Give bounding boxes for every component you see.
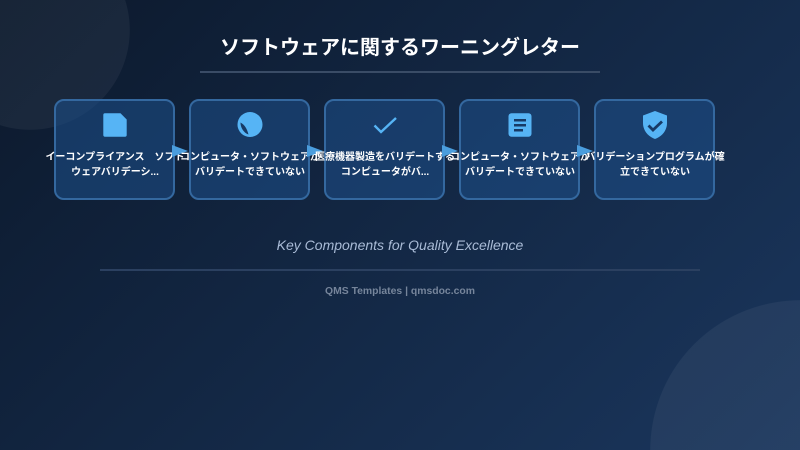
- icon: shield check: [643, 111, 667, 139]
- arrow 4: [577, 145, 593, 157]
- card 3 text: コンピュータがバ...: [341, 167, 429, 178]
- title underline: [200, 71, 600, 73]
- decorative circle: top left: [0, 0, 131, 131]
- card 3 text: [315, 150, 455, 178]
- panel: card 2: [189, 99, 310, 200]
- card 4 text: [450, 151, 590, 178]
- footer text: QMS Templates | qmsdoc.com: [325, 286, 475, 297]
- card 4 text: コンピュータ・ソフトウェアが: [450, 152, 590, 163]
- panel: card 1: [54, 99, 175, 200]
- title: ソフトウェアに関するワーニングレター: [220, 37, 580, 59]
- card 1 text: ウェアバリデーシ...: [71, 167, 159, 178]
- card 1 text: イーコンプライアンス ソフト: [45, 152, 185, 163]
- arrow 2: [307, 145, 323, 157]
- icon: circle with leaf: [238, 112, 262, 137]
- decorative circle: bottom right: [649, 299, 800, 450]
- arrow 3: [442, 145, 458, 157]
- icon: check mark: [374, 117, 397, 134]
- card 5 text: [585, 150, 725, 178]
- card 4 text: バリデートできていない: [465, 167, 575, 178]
- card 2 text: コンピュータ・ソフトウェアが: [180, 152, 320, 163]
- card 5 text: バリデーションプログラムが確: [585, 152, 725, 163]
- icon: document: [103, 113, 127, 137]
- card 2 text: [180, 151, 320, 178]
- arrow 1: [172, 145, 188, 157]
- panel: card 5: [594, 99, 715, 200]
- card 5 text: 立できていない: [620, 167, 690, 178]
- panel: card 3: [324, 99, 445, 200]
- card 2 text: バリデートできていない: [195, 167, 305, 178]
- panel: card 4: [459, 99, 580, 200]
- card 3 text: 医療機器製造をバリデートする: [315, 152, 455, 163]
- subtitle: Key Components for Quality Excellence: [277, 237, 523, 253]
- icon: article: [508, 113, 532, 137]
- footer divider: [100, 269, 700, 271]
- card 1 text: [45, 151, 185, 178]
